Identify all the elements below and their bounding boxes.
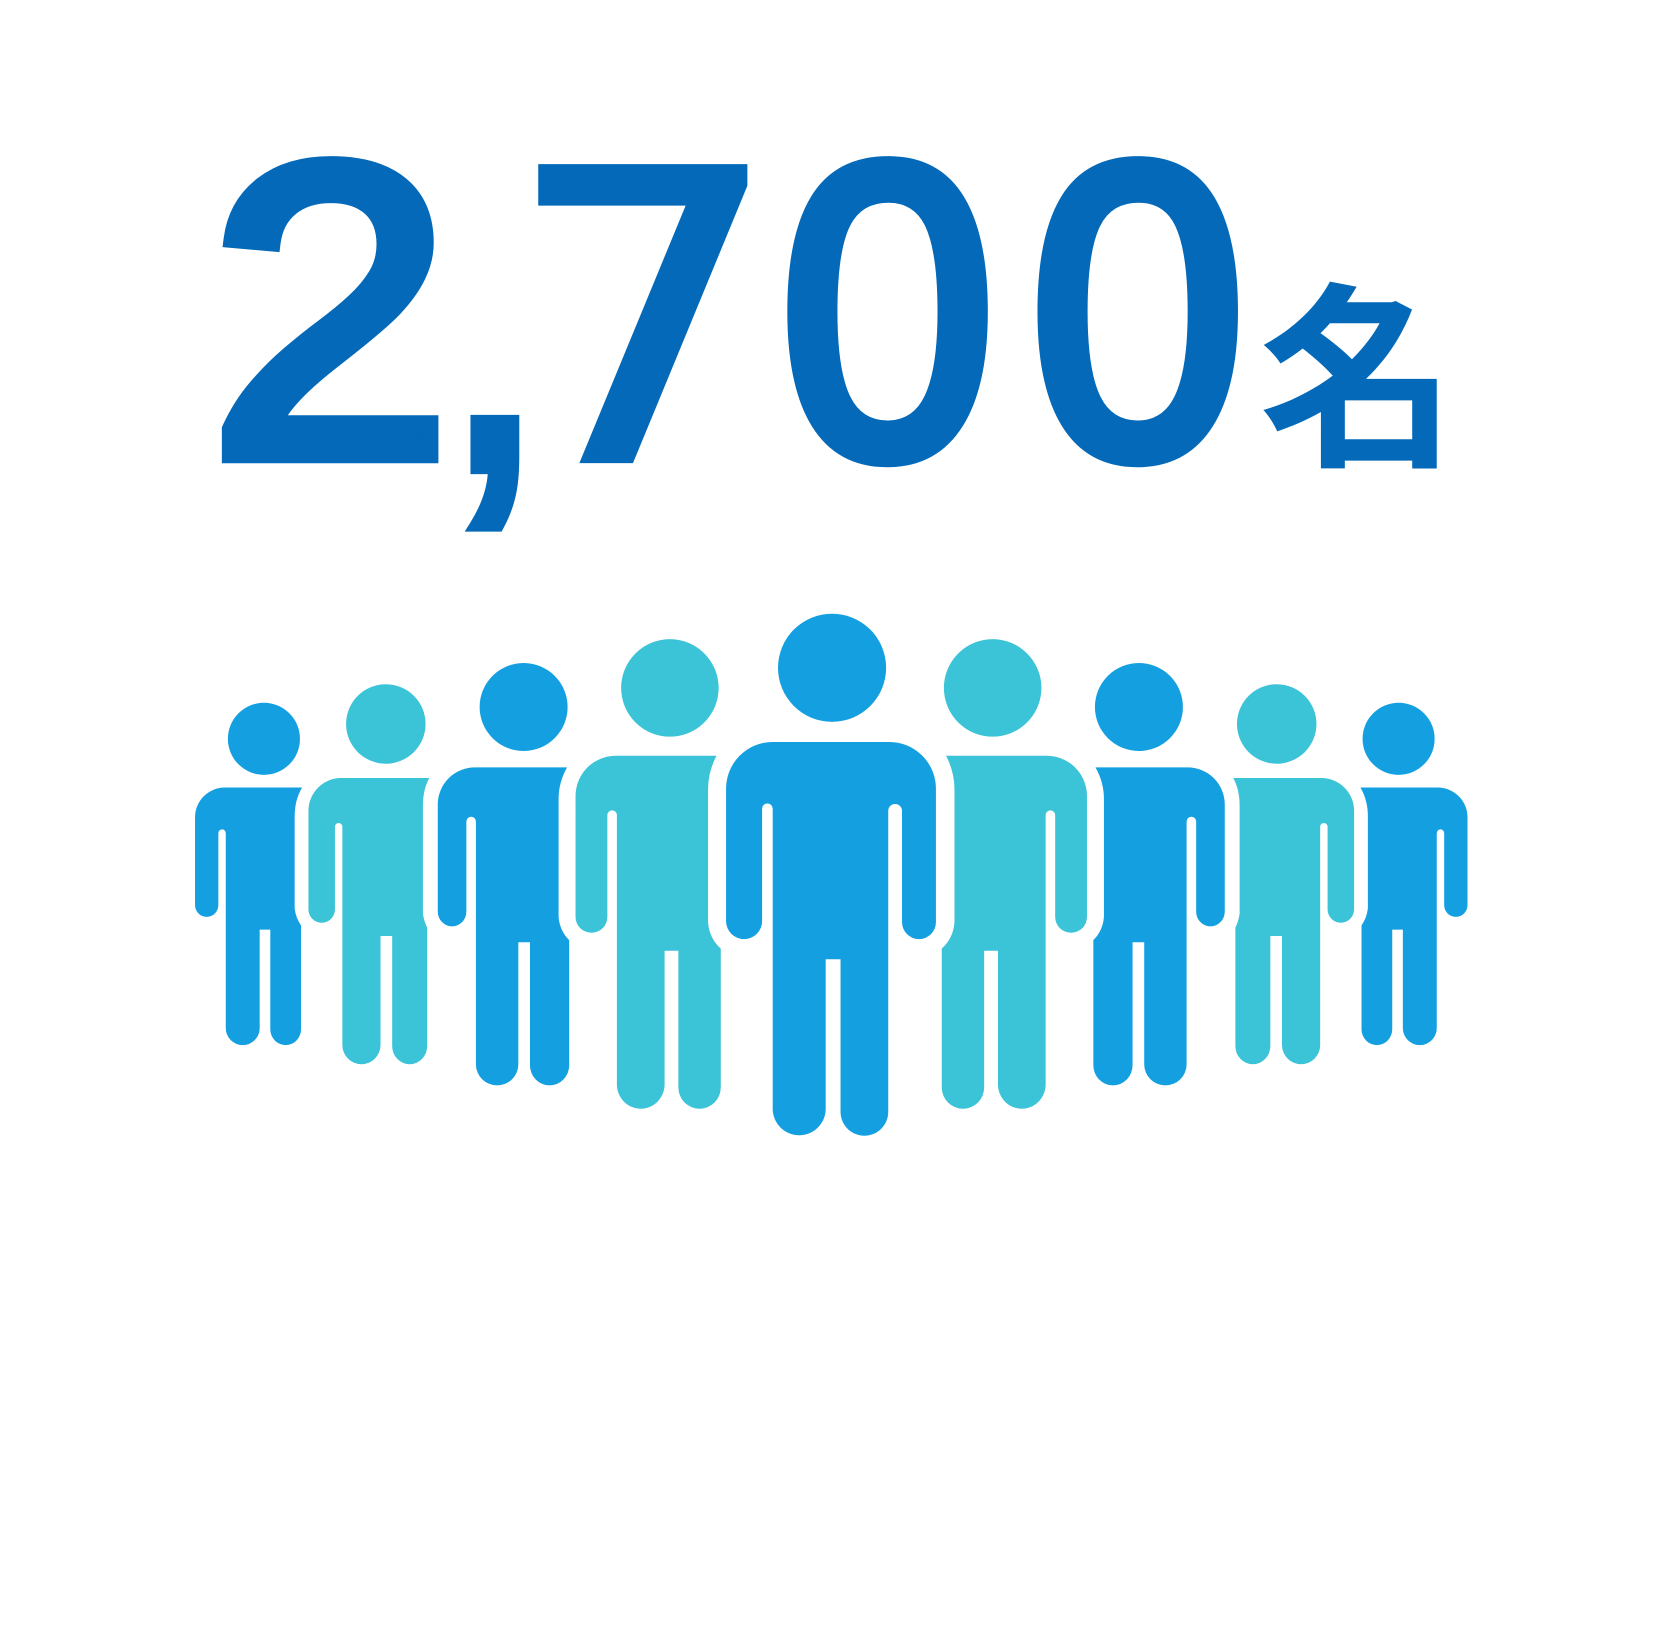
person: third left, blue [438, 663, 569, 1085]
person: far right, blue [1360, 703, 1467, 1045]
person: fourth left, teal [576, 639, 721, 1109]
person: far left, blue [195, 703, 302, 1045]
unit: 名: 名 [1259, 272, 1457, 493]
headline number: 2,700 [209, 62, 1245, 564]
person: centre, blue [726, 614, 936, 1136]
person: third right, blue [1093, 663, 1225, 1085]
headline number: 2,700: 0 [1030, 80, 1245, 544]
headline number: 2,700: , [438, 62, 551, 564]
headline number: 2,700: 2 [209, 79, 451, 543]
person: second left, teal [308, 684, 429, 1064]
headline number: 2,700: 0 [780, 80, 995, 544]
person: second right, teal [1233, 684, 1354, 1064]
headline number: 2,700: 7 [508, 90, 779, 554]
group of nine people [195, 614, 1467, 1136]
person: fourth right, teal [942, 639, 1087, 1109]
